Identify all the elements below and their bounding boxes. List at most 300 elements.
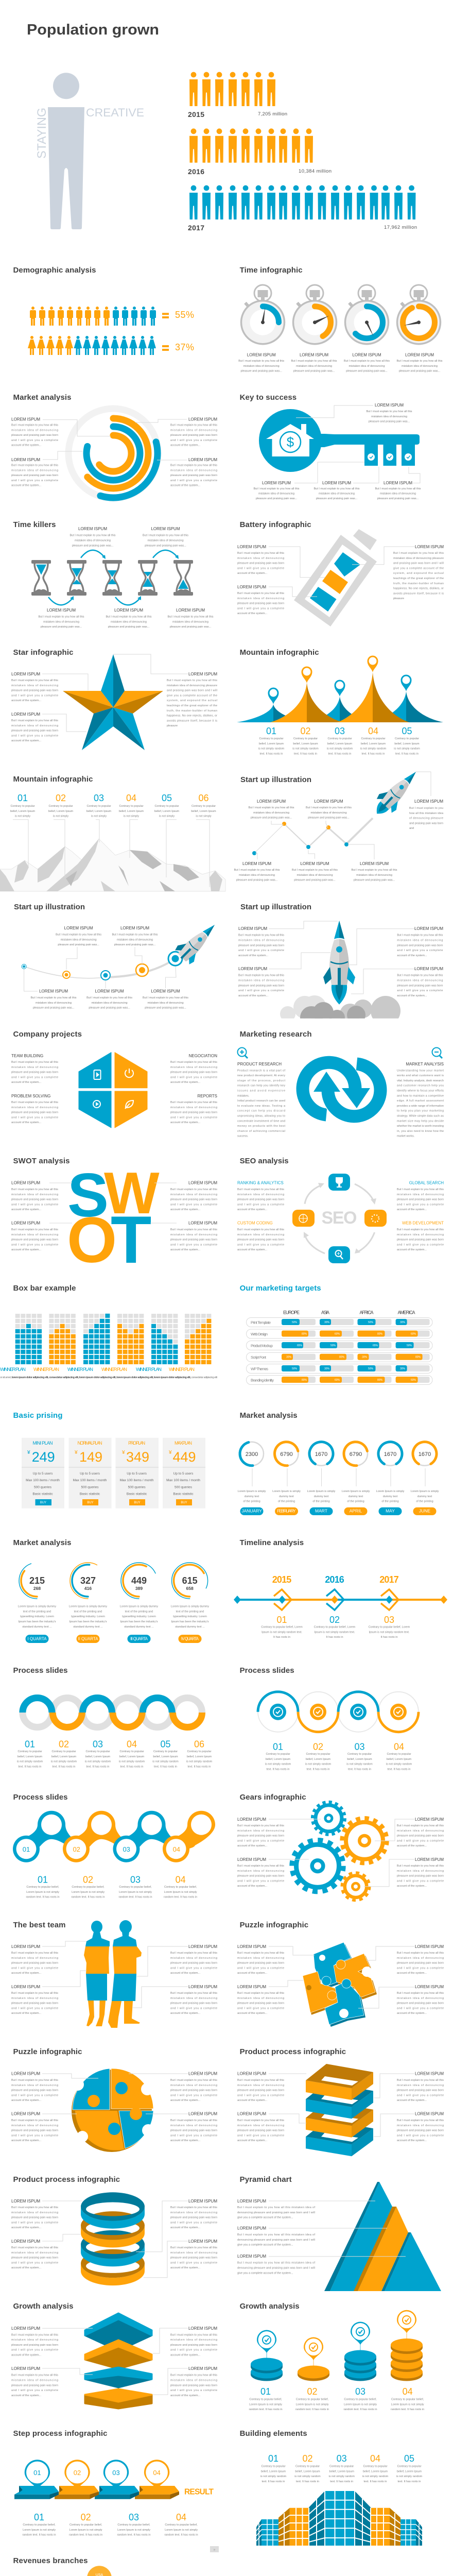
text block: left 2: and I will give you a complete: [11, 2007, 58, 2010]
item 04: [362, 2453, 389, 2483]
result label: RESULT: [184, 2488, 214, 2497]
step 06: 06: [194, 1739, 204, 1750]
text block: market analysis: and how to maintain a competitive: [397, 1094, 444, 1097]
text block: bottom right: mistaken idea of denouncing: [170, 469, 217, 472]
step 01: Lorem Ipsum is not simply: [26, 1891, 59, 1894]
step 04: Contrary to popular: [119, 1750, 144, 1753]
text block: left 1: pleasure and praising pain was born: [11, 2344, 58, 2347]
text block: bottom 2: But I must explain to you how all this: [106, 615, 152, 618]
text block: bottom 3: [352, 861, 397, 882]
text block: level 2: give you a complete account of the system...: [237, 2244, 293, 2247]
text block: left 1: mistaken idea of denouncing: [238, 939, 284, 942]
text block: left 1: and I will give you a complete: [11, 694, 58, 697]
text block: left 1: But I must explain to you how all this: [238, 934, 284, 937]
text block: right 1: pleasure and praising pain was born: [170, 2216, 217, 2219]
text block: opportunities: LOREM ISPUM: [11, 1221, 40, 1226]
step 03: Lorem Ipsum is not simply: [119, 1891, 152, 1894]
text block: strengths: pleasure and praising pain was born: [11, 1198, 58, 1201]
text block: top 2: But I must explain to you how all this: [143, 534, 188, 537]
milestone 2015: It has roots in: [273, 1636, 290, 1639]
chain numbers: 04: [173, 1845, 180, 1853]
milestone 2017: 2017: [379, 1574, 399, 1585]
small grey button: »: [214, 2548, 216, 2552]
text block: bottom 3: [143, 989, 188, 1010]
plan labels: WINNER PLAN: [0, 1367, 26, 1372]
text block: right 1: pleasure and praising pain was born: [397, 2089, 444, 2092]
item 03: 03: [129, 2512, 139, 2522]
month may: MAY: [386, 1509, 395, 1514]
text block: top right: and I will give you a complete: [170, 439, 217, 442]
text block: left 1: LOREM ISPUM: [237, 545, 266, 549]
text block: right 2: account of the system...: [397, 994, 427, 997]
text block: bottom right: [170, 457, 217, 487]
text block: top: LOREM ISPUM: [375, 403, 404, 408]
text block: right: pleasure: [167, 724, 178, 727]
step 04: 04: [394, 1742, 404, 1752]
text block: left 2: But I must explain to you how all this: [11, 719, 58, 722]
text block: right 2: But I must explain to you how all this: [170, 2374, 217, 2377]
step 03: Contrary to popular belief,: [119, 1886, 152, 1889]
plan card: normal: 500 queries: [81, 1485, 99, 1489]
item 01: 01: [18, 793, 28, 803]
text block: left 2: But I must explain to you how all this: [237, 1865, 284, 1868]
heading: Marketing research: [240, 1030, 312, 1039]
row: product mockup: Product Mockup: [251, 1344, 273, 1348]
item 04: belief, Lorem Ipsum: [119, 810, 144, 813]
quarter 4 text: Lorem Ipsum is simply dummy: [171, 1605, 209, 1608]
plan labels: WINNER PLAN: [33, 1367, 59, 1372]
step 02: 02: [313, 1742, 323, 1752]
text block: left 2: and I will give you a complete: [237, 1879, 284, 1883]
row: branding identity: Branding identity: [251, 1378, 274, 1383]
text block: top 1: But I must explain to you how all this: [56, 934, 101, 937]
text block: right: But I must explain to you how all this: [167, 679, 217, 682]
text block: left 2: pleasure and praising pain was born: [238, 984, 284, 987]
row: web design: Web Design: [251, 1332, 268, 1336]
text block: global search: and I will give you a complete: [397, 1203, 444, 1206]
pictogram row 2015: [189, 72, 275, 106]
step 01: 01: [38, 1875, 48, 1885]
text block: web development: account of the system...: [397, 1248, 427, 1251]
quarter 2 text: typesetting industry. Lorem: [71, 1615, 105, 1618]
text block: market analysis: works and what customers want is: [396, 1074, 444, 1077]
text block: reports: [170, 1094, 217, 1124]
text block: left 1: and I will give you a complete: [237, 567, 284, 570]
text block: strengths: [11, 1181, 58, 1211]
milestone 2016: Contrary to popular belief, Lorem: [314, 1625, 356, 1629]
row: wp themes: 30%: [324, 1367, 330, 1370]
step 03: belief, Lorem Ipsum: [347, 1758, 372, 1761]
text block: bottom 3: But I must explain to you how all this: [352, 869, 397, 872]
item 03: is not simply: [91, 815, 107, 818]
panel: revenues branches: [13, 2556, 203, 2576]
stopwatch 1: [241, 285, 284, 344]
text block: right 2: account of the system...: [170, 2012, 201, 2015]
text block: left 1: [11, 2326, 58, 2357]
step 04: is not simply random: [386, 1763, 412, 1766]
text block: top: But I must explain to you how all this: [367, 410, 412, 413]
text block: left 1: mistaken idea of denouncing: [237, 1957, 284, 1960]
gear large blue: [292, 1840, 343, 1892]
text block: weaknesses: But I must explain to you how all this: [170, 1188, 217, 1191]
text block: right 1: [170, 2072, 217, 2102]
text block: right 1: LOREM ISPUM: [414, 926, 443, 931]
text block: market analysis: to help you plan your marketing: [397, 1110, 444, 1113]
text block: left 1: and I will give you a complete: [237, 2094, 284, 2097]
month june: of the printing: [416, 1500, 433, 1503]
text block: level 1: LOREM ISPUM: [237, 2199, 266, 2204]
text block: level 2: [237, 2226, 315, 2247]
step 04: belief, Lorem Ipsum: [119, 1755, 145, 1758]
item 02: [294, 2453, 321, 2483]
quarter 3 text: text of the printing and: [125, 1611, 153, 1614]
text block: right 2: But I must explain to you how all this: [170, 1992, 217, 1995]
text block: right 1: pleasure and praising pain was born: [397, 1835, 444, 1838]
pin 01: [25, 2460, 50, 2490]
text block: right 2: and I will give you a complete: [170, 2261, 217, 2264]
step 01: [26, 1875, 60, 1899]
icon: rocket: [173, 917, 223, 967]
text block: right 1: [397, 926, 443, 957]
panel: growth analysis diamonds: [11, 2302, 217, 2409]
step 02: Lorem Ipsum is not simply: [72, 1891, 104, 1894]
text block: left 2: account of the system...: [11, 2139, 42, 2142]
text block: right 2: LOREM ISPUM: [415, 1857, 444, 1862]
item 02: 02: [302, 2453, 313, 2464]
step 03: [346, 1742, 373, 1771]
gauge may: [374, 1437, 406, 1470]
panel: puzzle infographic round: [11, 2047, 217, 2152]
text block: reports: and I will give you a complete: [170, 1116, 217, 1119]
heading: Start up illustration: [14, 903, 85, 911]
step 06: is not simply random: [186, 1760, 213, 1764]
panel: star infographic: [11, 648, 217, 750]
step 01: is not simply random: [265, 1763, 291, 1766]
item 01: is not simply random: [260, 2475, 287, 2478]
caption 3: LOREM ISPUM: [352, 353, 381, 358]
text block: left 1: LOREM ISPUM: [237, 2072, 266, 2076]
text block: product research: research can help you identify key: [237, 1084, 285, 1088]
icons: quadrant glyphs: [93, 1069, 133, 1109]
item 04: is not simply random: [360, 748, 387, 751]
text block: right 1: pleasure and praising pain was born: [170, 2089, 217, 2092]
text block: right: LOREM ISPUM: [415, 545, 444, 549]
text block: right 1: mistaken idea of denouncing: [397, 1957, 444, 1960]
month february: FEBRUARY: [277, 1509, 296, 1514]
stopwatch 2: [293, 285, 337, 344]
item 01: is not simply random: [258, 748, 285, 751]
text block: custom coding: [237, 1221, 284, 1251]
panel: mountain infographic with pins: [237, 648, 443, 756]
step 04: Lorem Ipsum is not simply: [164, 1891, 197, 1894]
text block: left 2: pleasure and praising pain was born: [11, 2002, 58, 2005]
gauge april: [343, 1441, 369, 1467]
text block: custom coding: CUSTOM CODING: [237, 1221, 273, 1226]
chain shape: [13, 1811, 215, 1862]
plan card: pro: BUY: [134, 1501, 141, 1504]
text block: opportunities: [11, 1221, 58, 1251]
stopwatch 4: [397, 285, 441, 344]
text block: right 2: account of the system...: [397, 1885, 427, 1888]
text block: negociation: mistaken idea of denouncing: [170, 1066, 217, 1069]
text block: team building: But I must explain to you how all this: [11, 1061, 58, 1064]
text block: left 2: LOREM ISPUM: [11, 2366, 40, 2371]
month may: dummy text: [383, 1495, 398, 1498]
caption 1: LOREM ISPUM: [247, 353, 276, 358]
text block: right 2: But I must explain to you how all this: [170, 2246, 217, 2249]
item 03: [327, 726, 353, 756]
row: wp themes: WP Themes: [251, 1366, 268, 1371]
text block: left 2: [11, 2112, 58, 2142]
icon: search tile: [328, 1246, 350, 1263]
step 03: 03: [93, 1739, 103, 1750]
text block: right 2: mistaken idea of denouncing: [397, 2124, 444, 2127]
text block: left 2: But I must explain to you how all this: [237, 1992, 284, 1995]
item 02: text. It has roots in: [294, 753, 317, 756]
month january: Lorem Ipsum is simply: [238, 1490, 266, 1493]
text block: global search: account of the system...: [397, 1208, 427, 1211]
text block: threats: pleasure and praising pain was born: [170, 1239, 217, 1242]
text block: right 1: pleasure and praising pain was born: [170, 1962, 217, 1965]
item 04: Lorem Ipsum is not simply: [391, 2403, 424, 2406]
text block: right 1: LOREM ISPUM: [188, 1944, 217, 1949]
row: branding identity: [246, 1376, 432, 1385]
text block: top 2: pleasure and praising pain was...: [308, 817, 350, 820]
row: web design: 60%: [335, 1332, 340, 1335]
quarter 3 gauge: 389: [135, 1586, 143, 1591]
text block: left 2: mistaken idea of denouncing: [237, 1997, 284, 2000]
text block: bottom 3: mistaken idea of denouncing: [172, 620, 208, 623]
item 03: Contrary to popular belief,: [344, 2398, 377, 2401]
bell peaks chart: [237, 655, 443, 722]
text block: right 1: and I will give you a complete: [397, 949, 443, 952]
text block: left 2: But I must explain to you how all this: [11, 2119, 58, 2122]
plan card: mini: 500 queries: [34, 1485, 52, 1489]
panel: start up rocket launch: [238, 903, 443, 1029]
text block: right 2: But I must explain to you how all this: [397, 2119, 444, 2122]
text block: right 1: LOREM ISPUM: [188, 2326, 217, 2331]
step 02: 02: [59, 1739, 69, 1750]
text block: bottom 2: [292, 861, 338, 882]
text block: team building: and I will give you a complete: [11, 1076, 58, 1079]
text block: threats: account of the system...: [170, 1248, 201, 1251]
text block: right: avoids pleasure itself, because it is: [393, 592, 444, 595]
stacked box frames: [306, 2064, 373, 2156]
caption 3: But I must explain to you how all this: [344, 360, 390, 363]
text block: left 1: mistaken idea of denouncing: [237, 557, 284, 560]
heading: Product process infographic: [240, 2047, 346, 2056]
gear small orange: [342, 1873, 370, 1901]
month january: dummy text: [245, 1495, 259, 1498]
milestone 2016: 2016: [325, 1574, 344, 1585]
item 01: [22, 2512, 56, 2537]
text block: left 2: mistaken idea of denouncing: [237, 2124, 284, 2127]
item 02: text. It has roots in: [296, 2480, 319, 2483]
stacked rings: [81, 2192, 145, 2285]
plan card: normal: 149: [79, 1449, 102, 1465]
item 03: random text. It has roots in: [343, 2408, 377, 2411]
text block: bottom 1: LOREM ISPUM: [242, 861, 271, 866]
caption 3: mistaken idea of denouncing: [349, 365, 385, 368]
text block: level 1: give you a complete account of the system...: [237, 2216, 293, 2219]
text block: right 2: and I will give you a complete: [397, 2007, 444, 2010]
item 01: belief, Lorem Ipsum: [259, 742, 284, 745]
text block: market analysis: MARKET ANALYSIS: [406, 1062, 444, 1066]
text block: bottom 3: [168, 608, 214, 629]
item 01: random text. It has roots in: [22, 2534, 56, 2537]
text block: right 2: LOREM ISPUM: [188, 2239, 217, 2244]
step 06: text. It has roots in: [188, 1766, 211, 1769]
panel: demographic analysis: [13, 266, 194, 355]
text block: bottom left: mistaken idea of denouncing: [11, 469, 58, 472]
caption 4: But I must explain to you how all this: [397, 360, 443, 363]
text block: top 1: pleasure and praising pain was...: [72, 544, 114, 547]
text block: level 3: LOREM ISPUM: [237, 2254, 266, 2259]
step 01: text. It has roots in: [267, 1768, 289, 1771]
text block: right 1: account of the system...: [170, 2099, 201, 2102]
text block: top left: LOREM ISPUM: [11, 417, 40, 422]
item 05: text. It has roots in: [398, 2480, 421, 2483]
text block: left 1: account of the system...: [238, 954, 269, 957]
text block: left 2: account of the system...: [237, 1885, 268, 1888]
row: product mockup: 50%: [407, 1344, 412, 1347]
step 03: belief, Lorem Ipsum: [85, 1755, 111, 1758]
text block: negociation: [170, 1054, 217, 1084]
text block: left 2: account of the system...: [237, 2139, 268, 2142]
text block: left 2: mistaken idea of denouncing: [11, 724, 58, 727]
item 05: [154, 793, 180, 818]
item 04: Lorem Ipsum is not simply: [165, 2529, 198, 2532]
quarter 2 text: II QUARTA: [78, 1636, 98, 1641]
icon: zoom out: [432, 1048, 442, 1058]
text block: top 1: mistaken idea of denouncing: [75, 539, 111, 543]
text block: weaknesses: [170, 1181, 217, 1211]
step 05: belief, Lorem Ipsum: [153, 1755, 178, 1758]
caption 4: pleasure and praising pain was...: [399, 370, 441, 373]
text block: negociation: and I will give you a complete: [170, 1076, 217, 1079]
text block: left 2: mistaken idea of denouncing: [11, 2379, 58, 2382]
caption 3: pleasure and praising pain was...: [346, 370, 388, 373]
text block: right: how all this mistaken idea: [409, 812, 444, 815]
step 01: belief, Lorem Ipsum: [266, 1758, 291, 1761]
text block: right 2: pleasure and praising pain was born: [397, 2002, 444, 2005]
month may: Lorem Ipsum is simply: [376, 1490, 405, 1493]
text block: right 2: pleasure and praising pain was born: [170, 2384, 217, 2387]
text block: bottom 1: pleasure and praising pain was...: [41, 625, 82, 629]
quarter 4 text: standard dummy text ...: [175, 1625, 205, 1629]
value 2016: 10,384 million: [299, 168, 332, 174]
text block: left 1: But I must explain to you how all this: [11, 1952, 58, 1955]
text block: top left: account of the system...: [11, 444, 42, 447]
item 02: [48, 793, 74, 818]
panel: gears infographic: [237, 1793, 444, 1901]
text block: left 1: account of the system...: [11, 2226, 42, 2229]
item 05: Contrary to popular: [395, 737, 419, 740]
item 02: Contrary to popular belief,: [296, 2398, 329, 2401]
plan card: max: 449: [173, 1449, 196, 1465]
row: web design: 60%: [411, 1332, 416, 1335]
step 04: text. It has roots in: [120, 1766, 143, 1769]
text block: left 1: LOREM ISPUM: [237, 1817, 266, 1822]
item 02: belief, Lorem Ipsum: [48, 810, 74, 813]
item 01: random text. It has roots in: [249, 2408, 283, 2411]
quarter 3 text: typesetting industry. Lorem: [122, 1615, 156, 1618]
text block: right 2: [397, 2112, 444, 2142]
plan labels: WINNER PLAN: [169, 1367, 195, 1372]
item 05: Contrary to popular: [154, 805, 179, 808]
heading: Basic prising: [13, 1411, 63, 1420]
caption 3: [344, 353, 390, 373]
text block: left 2: account of the system...: [11, 2394, 42, 2397]
pin 01: 01: [33, 2469, 41, 2477]
item 04: [119, 793, 144, 818]
step 03: is not simply random: [85, 1760, 111, 1764]
text block: threats: [170, 1221, 217, 1251]
text block: right 1: mistaken idea of denouncing: [170, 2338, 217, 2342]
text block: right 1: and I will give you a complete: [397, 1967, 444, 1970]
panel: swot analysis: [11, 1157, 217, 1277]
icon: rocket launching: [323, 921, 355, 1005]
text block: market analysis: and customer research help you: [397, 1084, 444, 1088]
text block: left 1: and I will give you a complete: [11, 1967, 58, 1970]
milestone 2015: 01: [276, 1615, 287, 1625]
text block: left 2: pleasure and praising pain was born: [11, 730, 58, 733]
text block: right 1: But I must explain to you how all this: [397, 1952, 444, 1955]
plan card: normal: NORMAL PLAN: [77, 1440, 102, 1446]
text block: bottom 3: But I must explain to you how all this: [143, 996, 188, 999]
item 05: is not simply: [159, 815, 175, 818]
text block: left 2: pleasure and praising pain was born: [11, 2257, 58, 2260]
row: script font: Script Font: [251, 1355, 267, 1360]
plan card: mini: MINI PLAN: [33, 1440, 53, 1446]
plan labels: WINNER PLAN: [101, 1367, 127, 1372]
item 02: belief, Lorem Ipsum: [295, 2470, 320, 2473]
row: wp themes: 50%: [368, 1367, 374, 1370]
item 05: [396, 2453, 423, 2483]
text block: left 1: But I must explain to you how all this: [11, 679, 58, 682]
text block: threats: But I must explain to you how all this: [170, 1228, 217, 1231]
chain numbers: 03: [123, 1845, 130, 1853]
text block: left 2: and I will give you a complete: [237, 2134, 284, 2137]
text block: left 1: [11, 2199, 58, 2229]
quarter 2 gauge: 416: [84, 1586, 92, 1591]
item 01: Contrary to popular: [259, 737, 284, 740]
heading: Star infographic: [13, 648, 73, 657]
item 01: 01: [268, 2453, 278, 2464]
row: wp themes: 30%: [400, 1367, 406, 1370]
text block: bottom 3: pleasure and praising pain was...: [354, 879, 395, 882]
text block: top 1: pleasure and praising pain was...: [251, 817, 292, 820]
text block: bottom centre: mistaken idea of denouncing: [319, 493, 355, 496]
text block: left 2: [237, 2112, 284, 2142]
chevron ribbon: [14, 2486, 179, 2499]
text block: left 1: and I will give you a complete: [11, 2094, 58, 2097]
text block: right 2: LOREM ISPUM: [414, 967, 443, 971]
text block: bottom 3: mistaken idea of denouncing: [147, 1002, 184, 1005]
text block: left 1: mistaken idea of denouncing: [237, 1829, 284, 1833]
step 01: Contrary to popular: [266, 1753, 290, 1756]
text block: right 2: pleasure and praising pain was born: [170, 2002, 217, 2005]
letter S: S: [67, 1161, 109, 1230]
step 05: [152, 1739, 179, 1769]
step 01: [265, 1742, 291, 1771]
text block: left 2: account of the system...: [237, 2012, 268, 2015]
text block: bottom 1: [31, 989, 77, 1010]
text block: global search: mistaken idea of denouncing: [397, 1193, 444, 1196]
item 03: 03: [337, 2453, 347, 2464]
label: staying: STAYING: [35, 108, 49, 159]
text block: left 1: mistaken idea of denouncing: [11, 2211, 58, 2214]
